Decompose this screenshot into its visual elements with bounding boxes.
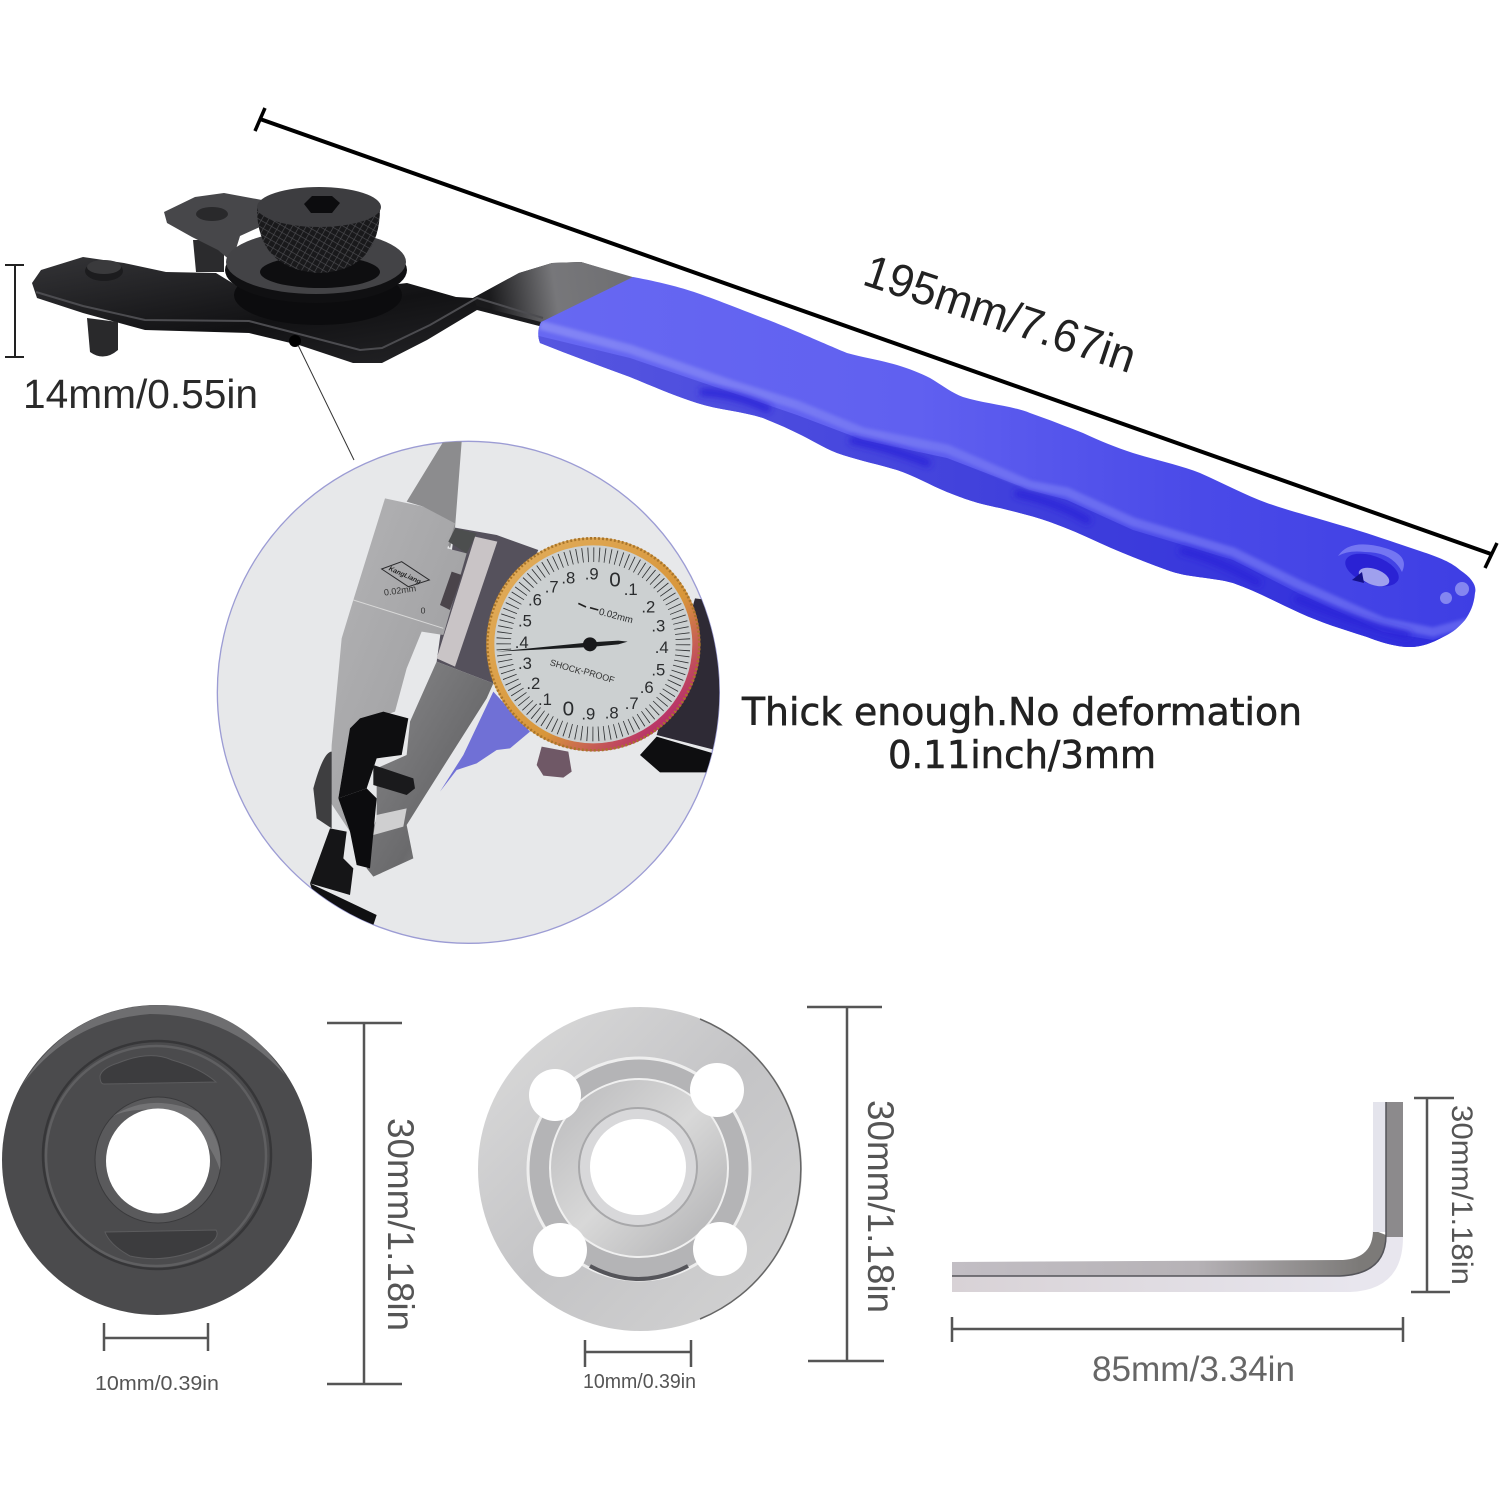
upper claw (164, 193, 262, 272)
black wrench head in caliper (310, 712, 415, 925)
knurled knob (257, 187, 381, 273)
bent section of the shank (473, 262, 636, 322)
caliper upper jaw (407, 442, 462, 548)
dimension: black flange diameter (327, 1023, 402, 1384)
dial gauge: .1 (624, 580, 638, 599)
callout: thickness (741, 690, 1302, 777)
dial gauge (486, 537, 700, 751)
dial gauge: 0 (609, 569, 621, 592)
label: hex key height: 30mm/1.18in (1445, 1105, 1478, 1285)
callout: thickness: 0.11inch/3mm (888, 733, 1156, 777)
caliper slider (437, 528, 538, 683)
maker logo: KangLiang (388, 565, 422, 586)
dial gauge: .2 (526, 674, 540, 693)
dial gauge: 0.02mm (598, 607, 634, 626)
blue handle (530, 277, 1480, 670)
dark block behind the gauge (640, 598, 722, 772)
wrench (32, 187, 1480, 670)
flange lug bottom (105, 1230, 217, 1259)
dimension: silver flange diameter (807, 1007, 884, 1361)
dial gauge: 0 (563, 698, 574, 721)
dial gauge: .3 (651, 616, 665, 635)
dial gauge: .4 (515, 633, 529, 652)
caliper main beam (330, 498, 467, 832)
callout: thickness: Thick enough.No deformation (741, 690, 1302, 734)
dial gauge: .5 (518, 611, 532, 630)
measuring bar (437, 537, 497, 667)
dial gauge: .4 (655, 638, 669, 657)
inset circle: caliper measuring plate thickness (217, 441, 722, 943)
flange lug top (100, 1056, 216, 1084)
maker logo (382, 562, 429, 615)
washer (225, 230, 407, 325)
dial gauge: .6 (528, 591, 542, 610)
label: hex key length: 85mm/3.34in (1092, 1350, 1295, 1389)
label: height: 14mm/0.55in (23, 371, 258, 417)
dial gauge: .9 (581, 705, 595, 724)
label: overall length: 195mm/7.67in (858, 244, 1143, 383)
dial gauge: .9 (585, 565, 599, 584)
blue handle shadow (440, 692, 530, 792)
silver flange (478, 1007, 802, 1331)
lower plate (32, 257, 640, 363)
dial gauge: .5 (651, 661, 665, 680)
maker logo: 0 (421, 605, 426, 615)
label: silver flange hole: 10mm/0.39in (583, 1371, 696, 1393)
maker logo: 0.02mm (383, 583, 417, 598)
label: black flange hole: 10mm/0.39in (95, 1373, 219, 1395)
dial gauge: .8 (605, 703, 619, 722)
dimension line: overall wrench length (255, 108, 1497, 568)
dial gauge: .7 (545, 577, 559, 596)
dial gauge: .2 (641, 597, 655, 616)
label: black flange diameter: 30mm/1.18in (380, 1118, 421, 1331)
dial gauge: .3 (518, 654, 532, 673)
dimension: hex key height (1411, 1098, 1454, 1292)
label: silver flange diameter: 30mm/1.18in (860, 1100, 901, 1313)
dial gauge: -PROOF (579, 665, 616, 685)
dial gauge: .7 (625, 694, 639, 713)
hex key (952, 1102, 1403, 1292)
slot (440, 572, 462, 610)
lower jaw (367, 662, 493, 877)
lower pin (85, 260, 123, 357)
dimension: black flange hole (104, 1323, 208, 1351)
dimension: hex key length (952, 1317, 1403, 1342)
black flange (2, 1005, 312, 1315)
stem knob (537, 747, 572, 778)
leader line to inset (289, 335, 354, 460)
dial gauge: .8 (561, 568, 575, 587)
dimension: silver flange hole (585, 1340, 691, 1367)
dial gauge: .1 (538, 690, 552, 709)
hang hole (1338, 544, 1469, 604)
height bracket (5, 265, 24, 357)
dial gauge: SHOCK (549, 657, 582, 676)
dial gauge: .6 (640, 678, 654, 697)
